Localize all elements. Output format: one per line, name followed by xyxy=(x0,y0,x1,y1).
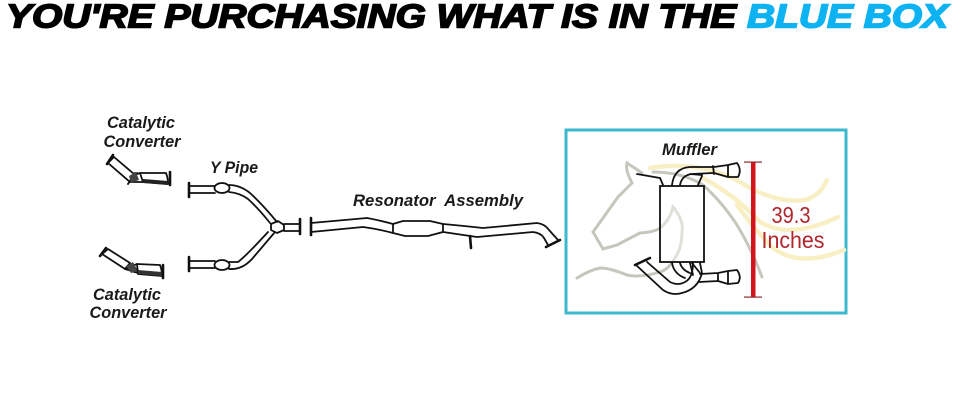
dimension value: 39.3 xyxy=(772,202,810,228)
icon: bottom catalytic converter xyxy=(100,248,163,278)
illustration: muffler body xyxy=(660,186,704,262)
label: bottom catalytic converter second line: Converter xyxy=(90,304,168,322)
icon: top catalytic converter xyxy=(107,155,170,185)
dimension bar: 39.3 inches xyxy=(744,162,762,298)
label: resonator assembly: Resonator Assembly xyxy=(353,192,524,210)
dimension unit: Inches xyxy=(762,227,824,253)
label: top catalytic converter: Catalytic xyxy=(107,114,175,132)
label: bottom catalytic converter: Catalytic xyxy=(93,286,161,304)
illustration: grey horse silhouette xyxy=(577,163,762,278)
label: Y pipe: Y Pipe xyxy=(210,159,258,177)
label: top catalytic converter second line: Converter xyxy=(104,133,182,151)
panel: blue box xyxy=(566,130,846,313)
diagram: resonator assembly xyxy=(311,218,560,248)
diagram: Y pipe xyxy=(189,183,300,271)
illustration: yellow flame mane xyxy=(650,166,844,259)
illustration: muffler bottom pipes xyxy=(635,258,740,294)
illustration: muffler top pipes xyxy=(637,163,740,185)
label: muffler: Muffler xyxy=(662,141,719,159)
